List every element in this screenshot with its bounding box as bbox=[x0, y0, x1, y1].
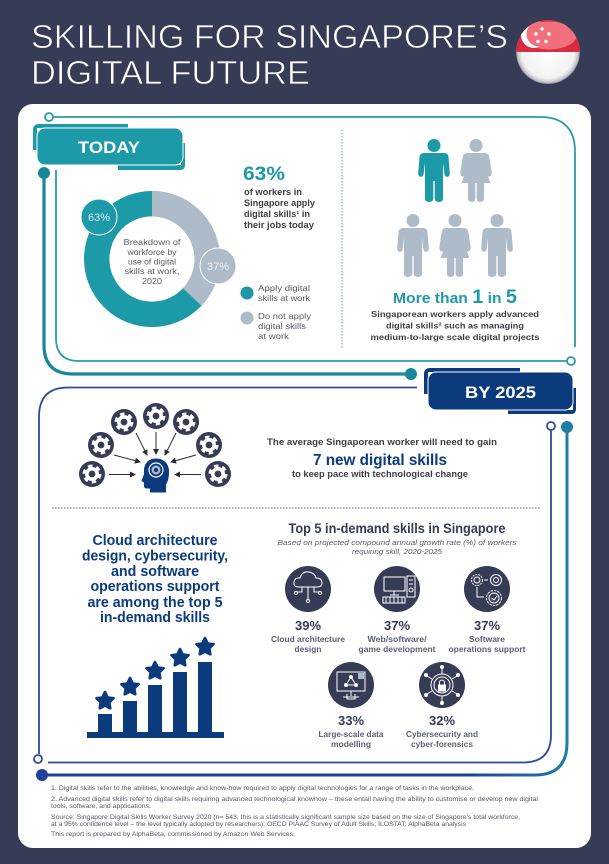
icon: linked gears bbox=[472, 574, 502, 606]
icon: desktop computer bbox=[383, 576, 415, 603]
text: 63% of workers: their jobs today bbox=[244, 220, 314, 230]
skill: large-scale data modelling bbox=[318, 662, 384, 749]
chart: workforce donut bbox=[81, 191, 236, 314]
donut centre label: skills at work, bbox=[124, 267, 180, 276]
footnotes: 2. Advanced digital skills refer to digital skills requiring advanced technological knowhow – these entail having the ability to customise or develop new digital bbox=[51, 797, 538, 803]
legend: Do not apply bbox=[258, 312, 311, 321]
text: more than 1 in 5: digital skills² such as managing bbox=[386, 320, 524, 330]
skill: cloud architecture design: 39% bbox=[295, 618, 321, 633]
skill: cloud architecture design bbox=[271, 566, 345, 654]
skill: web software game development: game development bbox=[358, 644, 436, 654]
donut centre label: Breakdown of bbox=[124, 238, 181, 247]
donut centre label: use of digital bbox=[128, 258, 176, 266]
title bbox=[31, 19, 508, 92]
skill: software operations support: operations support bbox=[448, 644, 526, 654]
legend bbox=[240, 284, 311, 341]
text: 7 new digital skills: to keep pace with technological change bbox=[292, 469, 468, 479]
skill: cybersecurity and cyber-forensics: 32% bbox=[429, 713, 455, 728]
badge: by 2025 bbox=[424, 368, 576, 414]
bubble: 63% bbox=[81, 199, 117, 235]
title: DIGITAL FUTURE bbox=[31, 55, 310, 92]
text: more than 1 in 5 bbox=[370, 287, 540, 342]
skill: software operations support: 37% bbox=[474, 618, 500, 633]
bubble: 37% bbox=[200, 248, 236, 284]
bubble: 37%: 37% bbox=[207, 261, 229, 273]
donut centre label bbox=[124, 238, 181, 286]
text: 7 new digital skills bbox=[267, 437, 497, 479]
skill: large-scale data modelling: modelling bbox=[331, 739, 371, 749]
text: cloud architecture callout: are among the top 5 bbox=[88, 595, 222, 611]
skill: cybersecurity and cyber-forensics: Cybersecurity and bbox=[406, 729, 478, 739]
skill: cybersecurity and cyber-forensics bbox=[406, 662, 478, 749]
skill: web software game development: 37% bbox=[384, 618, 410, 633]
donut centre label: workforce by bbox=[126, 248, 176, 257]
text: 63% of workers: 63% bbox=[243, 164, 285, 185]
legend: digital skills bbox=[258, 322, 306, 331]
skill: large-scale data modelling: Large-scale data bbox=[318, 729, 384, 739]
footnotes: tools, software, and applications. bbox=[51, 804, 151, 810]
icon: Singapore flag bbox=[516, 20, 580, 84]
text: 63% of workers: digital skills¹ in bbox=[244, 209, 310, 219]
text: more than 1 in 5: medium-to-large scale digital projects bbox=[370, 332, 540, 342]
badge: today bbox=[33, 124, 185, 170]
heading: top 5 skills bbox=[278, 520, 517, 556]
legend: skills at work bbox=[258, 294, 311, 303]
text: cloud architecture callout: and software bbox=[111, 564, 199, 580]
icon: monitor with data nodes bbox=[337, 672, 365, 699]
icon: cloud bbox=[294, 572, 322, 602]
skill: cloud architecture design: design bbox=[294, 644, 322, 654]
badge: by 2025: BY 2025 bbox=[465, 383, 536, 402]
legend: Apply digital bbox=[258, 284, 310, 293]
donut centre label: 2020 bbox=[142, 277, 163, 286]
panel: by 2025 connector lines bbox=[34, 388, 573, 781]
bubble: 63%: 63% bbox=[88, 212, 110, 224]
text: cloud architecture callout: in-demand skills bbox=[100, 610, 210, 626]
text: more than 1 in 5: More than 1 in 5 bbox=[393, 287, 517, 308]
title: SKILLING FOR SINGAPORE’S bbox=[31, 19, 508, 56]
icon: gears feeding into head bbox=[79, 403, 231, 492]
skill: software operations support bbox=[448, 566, 526, 654]
skill: software operations support: Software bbox=[469, 634, 505, 644]
footnotes: at a 95% confidence level – the level typically adopted by researchers); OECD PIAAC Survey of Adult Skills; ILOSTAT; AlphaBeta analysis bbox=[51, 822, 466, 828]
text: 63% of workers: Singapore apply bbox=[244, 198, 315, 208]
icon: secure padlock network bbox=[424, 666, 460, 704]
skill: cloud architecture design: Cloud architecture bbox=[271, 634, 345, 644]
panel: today connector lines bbox=[38, 113, 575, 380]
text: 7 new digital skills: The average Singaporean worker will need to gain bbox=[267, 437, 497, 447]
icon: five workers pictogram bbox=[397, 139, 513, 277]
text: cloud architecture callout: operations support bbox=[90, 579, 220, 595]
heading: top 5 skills: Based on projected compound annual growth rate (%) of workers bbox=[278, 538, 517, 547]
footnotes: This report is prepared by AlphaBeta, commissioned by Amazon Web Services. bbox=[51, 832, 295, 838]
legend: at work bbox=[258, 332, 290, 341]
heading: top 5 skills: requiring skill, 2020-2025 bbox=[352, 547, 443, 556]
skill: web software game development: Web/software/ bbox=[368, 634, 427, 644]
footnotes: 1. Digital skills refer to the abilities, knowledge and know-how required to apply digital technologies for a range of tasks in the workplace. bbox=[51, 786, 474, 792]
text: 63% of workers: of workers in bbox=[244, 187, 302, 197]
badge: today: TODAY bbox=[78, 138, 141, 157]
text: cloud architecture callout bbox=[82, 533, 228, 626]
chart: rising bars with stars bbox=[87, 638, 224, 738]
footnotes bbox=[51, 786, 538, 838]
text: 7 new digital skills: 7 new digital skills bbox=[313, 452, 447, 469]
skill: large-scale data modelling: 33% bbox=[338, 713, 364, 728]
footnotes: Source: Singapore Digital Skills Worker Survey 2020 (n= 543, this is a statistically significant sample size based on the size of Singapore’s total workforce, bbox=[51, 815, 520, 821]
text: cloud architecture callout: Cloud architecture bbox=[92, 533, 218, 549]
skill: web software game development bbox=[358, 566, 436, 654]
text: more than 1 in 5: Singaporean workers apply advanced bbox=[371, 309, 539, 319]
text: 63% of workers bbox=[243, 164, 315, 230]
skill: cybersecurity and cyber-forensics: cyber-forensics bbox=[411, 739, 473, 749]
heading: top 5 skills: Top 5 in-demand skills in Singapore bbox=[288, 520, 506, 536]
text: cloud architecture callout: design, cybersecurity, bbox=[82, 548, 228, 564]
